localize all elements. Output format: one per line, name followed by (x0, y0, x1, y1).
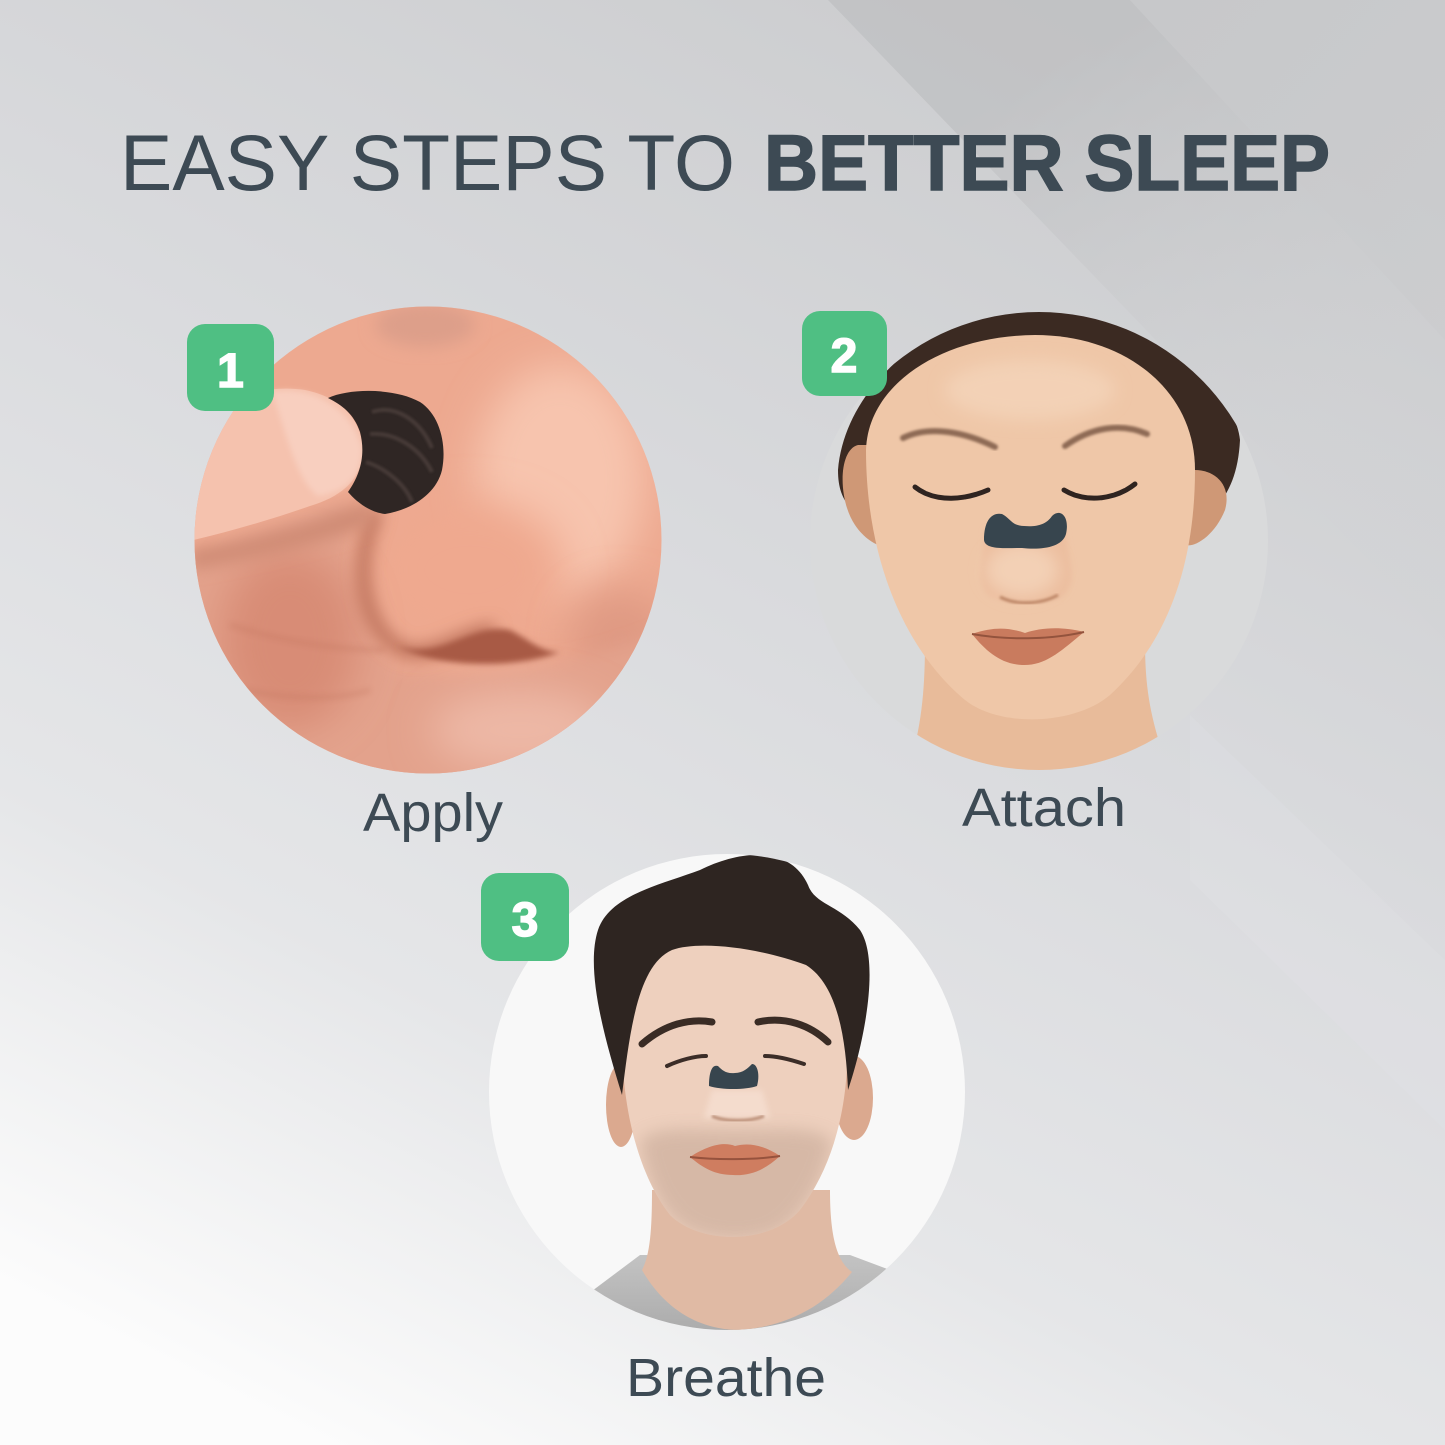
title: EASY STEPS TO (120, 118, 735, 207)
badge 3: 3 (512, 894, 538, 947)
badge 2: 2 (831, 330, 857, 383)
nose strip (984, 513, 1067, 549)
title: BETTER SLEEP (764, 118, 1330, 207)
ears (606, 1056, 873, 1147)
finger (185, 389, 362, 542)
label: Breathe: Breathe (626, 1348, 826, 1408)
closed eyes (667, 1056, 804, 1066)
lips (972, 628, 1084, 665)
nose (704, 1090, 770, 1120)
hair (838, 312, 1240, 500)
badge 3 (481, 873, 569, 961)
badge 2 (802, 311, 887, 396)
step 2 photo: woman with nose strip (838, 312, 1240, 770)
nostril crease (363, 515, 490, 652)
nose strip (709, 1064, 758, 1089)
neck (917, 654, 1158, 770)
face (622, 941, 847, 1237)
lips (690, 1144, 780, 1175)
label: Apply: Apply (363, 783, 503, 843)
eyebrows (903, 428, 1147, 447)
face (866, 335, 1195, 719)
upper nose tone (375, 303, 670, 690)
label: Attach: Attach (962, 778, 1126, 838)
cheek and lower shadow (195, 542, 636, 774)
stubble (640, 1129, 832, 1240)
forehead light (950, 362, 1110, 418)
step 3 photo: man with nose strip (485, 850, 970, 1340)
nose (994, 539, 1065, 604)
step 1 photo: finger pressing on nose (194, 306, 662, 774)
hair (594, 855, 870, 1095)
badge 1 (187, 324, 274, 411)
badge 1: 1 (217, 345, 244, 398)
neck (642, 1190, 852, 1330)
eyebrows (642, 1020, 828, 1044)
closed eyes (915, 484, 1135, 498)
ears (843, 445, 1227, 546)
dark adhesive ball (328, 391, 444, 514)
title (120, 118, 1330, 207)
shirt (594, 1255, 886, 1330)
shadow under finger (190, 500, 372, 570)
